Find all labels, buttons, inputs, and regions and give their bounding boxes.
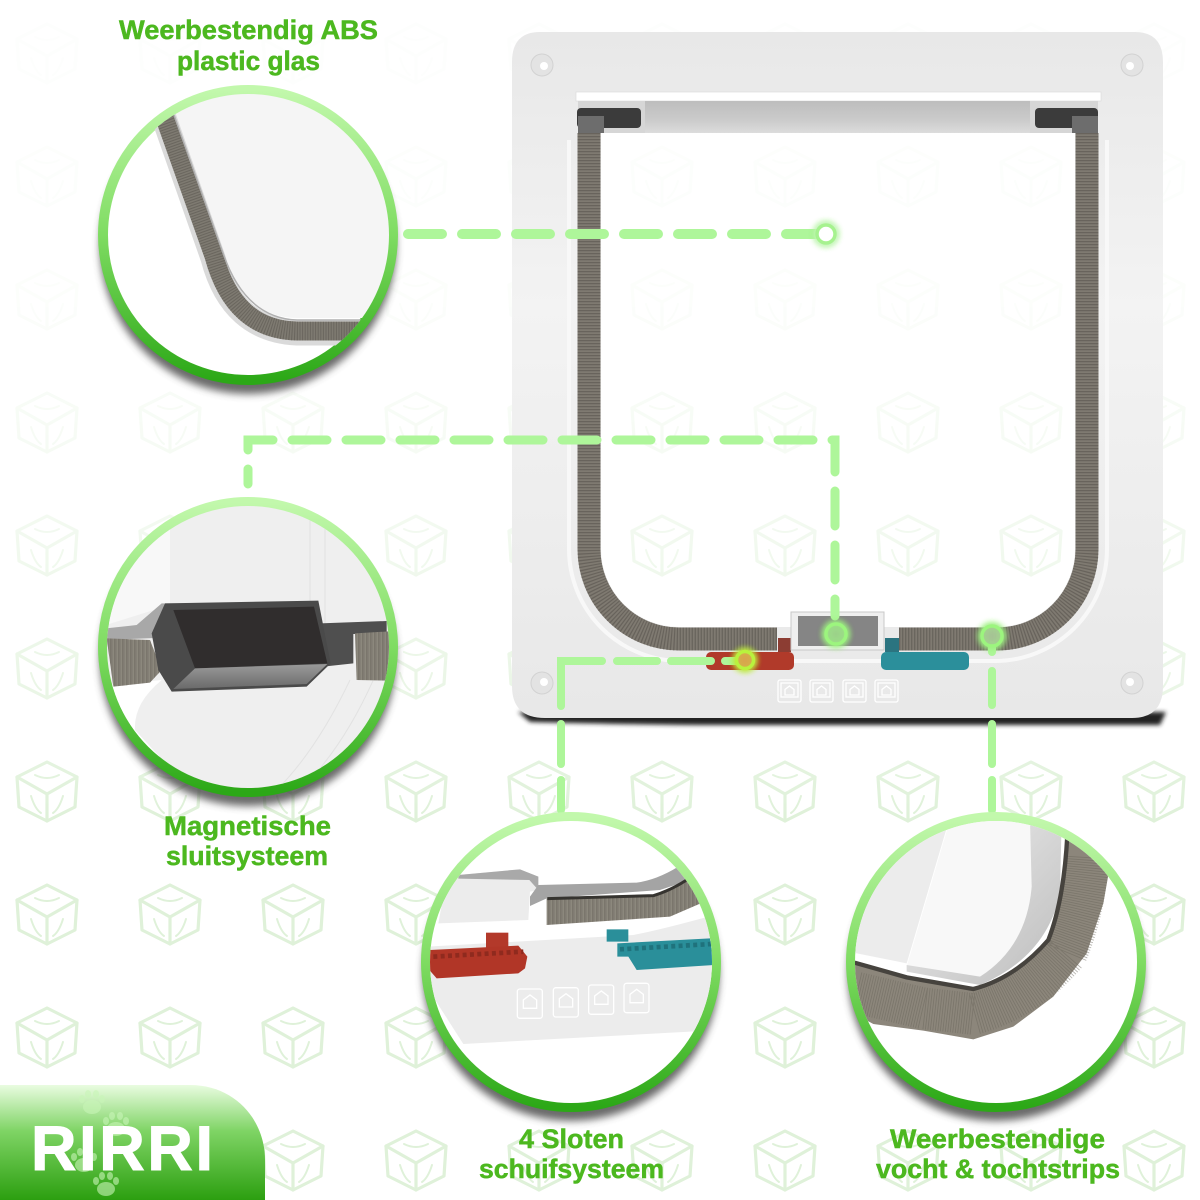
flap hinge band: [578, 101, 1098, 133]
product: white cat flap door: [512, 32, 1166, 725]
heading: magnet: sluitsysteem: [166, 841, 328, 871]
panel: detail circle locks: [420, 800, 740, 1121]
logo text: RIRRI: [31, 1114, 213, 1184]
shadow: [423, 825, 719, 1121]
detail image: [430, 821, 712, 1103]
top rail: [576, 92, 1101, 101]
panel: detail circle strips: [840, 800, 1160, 1121]
target dot: strips: [982, 626, 1002, 646]
badge background: [0, 1085, 265, 1200]
ring: [426, 817, 716, 1107]
heading: strips: vocht & tochtstrips: [876, 1154, 1120, 1184]
heading: locks: 4 Sloten: [519, 1124, 624, 1154]
magnet housing: [791, 612, 884, 650]
teal lock slider: [881, 638, 969, 670]
target dot: locks: [736, 652, 754, 668]
heading: magnet: Magnetische: [164, 811, 331, 841]
callout line: magnet: [248, 440, 835, 616]
logo badge: [0, 1085, 265, 1200]
left latch: [577, 108, 641, 133]
ring: [103, 502, 393, 792]
door shadow: [518, 712, 1166, 725]
brush: [853, 835, 1108, 1039]
detail image: [154, 94, 389, 346]
target dot: glass: [817, 225, 835, 243]
panel: detail circle glass: [100, 60, 400, 394]
translucent rails: [107, 603, 172, 640]
four lock position icons: [778, 680, 898, 702]
shadow: [100, 98, 396, 394]
callout line: plastic glas: [408, 229, 817, 239]
heading: strips: [876, 1124, 1120, 1184]
callout line: locks: [561, 661, 736, 810]
detail image: [855, 821, 1137, 1103]
target dot: magnet: [826, 624, 846, 644]
callout line: strips: [988, 645, 996, 810]
teal slider: [607, 929, 628, 942]
heading: glass: Weerbestendig ABS: [119, 15, 378, 45]
screw holes: [531, 54, 1143, 694]
heading: strips: Weerbestendige: [890, 1124, 1105, 1154]
magnet housing: [438, 875, 536, 924]
frame groove: [569, 140, 1107, 661]
ring: [851, 817, 1141, 1107]
position icons: [517, 983, 649, 1018]
background: cube watermark pattern: [15, 402, 1186, 1192]
heading: locks: [479, 1124, 664, 1184]
right latch: [1035, 108, 1098, 133]
grey strip: [530, 867, 690, 906]
magnet body: [152, 601, 331, 692]
brush weather strip: [589, 133, 1087, 639]
shadow: [848, 825, 1144, 1121]
door frame: [512, 32, 1163, 718]
ring: [103, 90, 393, 380]
paw prints: [71, 1090, 129, 1196]
right brush: [355, 631, 390, 681]
heading: glass: plastic glas: [177, 46, 320, 76]
red slider: [486, 933, 508, 948]
heading: glass: [119, 15, 378, 76]
dark carrier line: [855, 835, 1067, 989]
heading: locks: schuifsysteem: [479, 1154, 664, 1184]
red lock slider: [706, 638, 794, 670]
shadow: [100, 510, 396, 806]
detail image: [107, 506, 389, 788]
brush: [547, 879, 701, 925]
panel: detail circle magnet: [90, 490, 410, 810]
left brush: [107, 638, 162, 687]
heading: magnet: [164, 811, 331, 871]
